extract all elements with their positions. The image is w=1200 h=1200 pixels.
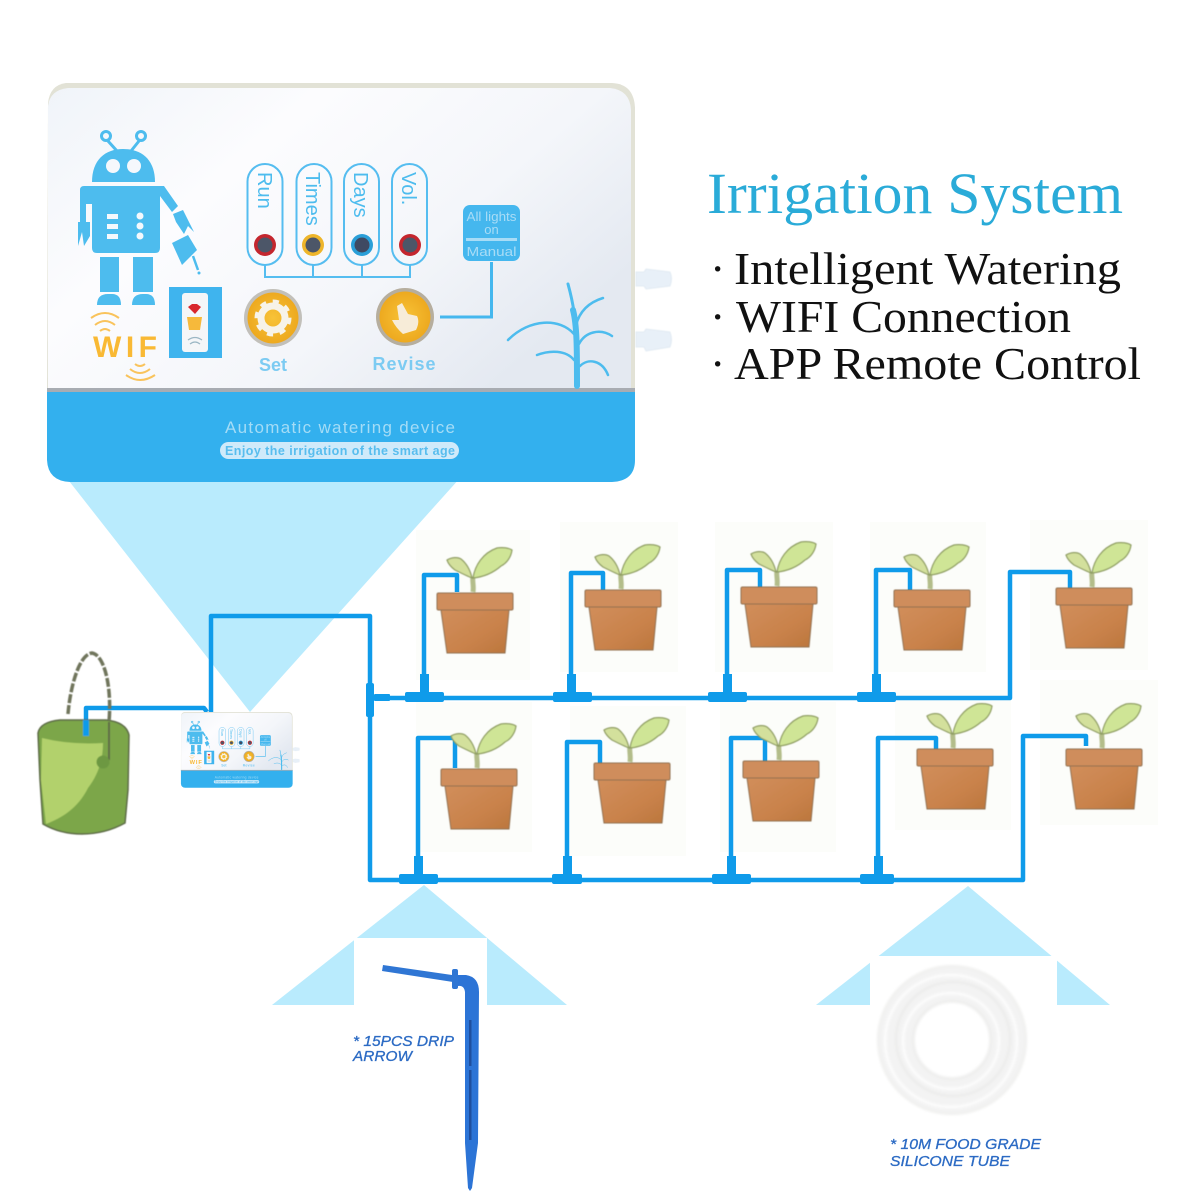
bucket handle ring — [96, 722, 110, 768]
WiFi label: WIF — [93, 331, 157, 364]
plant 3 — [741, 542, 817, 647]
plant graphic on device — [508, 284, 612, 386]
callout cone: device zoom — [62, 472, 460, 712]
plant 5 — [1056, 543, 1132, 648]
All lights on Manual key — [440, 205, 520, 317]
plant 2 — [585, 545, 661, 650]
All lights on Manual key: Manual — [466, 244, 517, 259]
indicator LEDs — [254, 234, 421, 256]
plant 10 — [1066, 704, 1142, 809]
feature list: · — [710, 338, 725, 389]
indicator pills — [248, 164, 427, 277]
All lights on Manual key: All lights — [466, 209, 517, 224]
drip arrow caption: * 15PCS DRIP — [353, 1033, 454, 1050]
silicone tube caption: * 10M FOOD GRADE — [890, 1136, 1042, 1153]
plant 6 — [441, 724, 517, 829]
callout cone: silicone tube — [816, 886, 1110, 1005]
white backing behind drip arrow — [354, 938, 487, 1018]
silicone tube caption: SILICONE TUBE — [890, 1153, 1011, 1170]
controller device enlarged — [47, 83, 672, 482]
indicator labels — [253, 172, 419, 226]
feature list — [710, 243, 1141, 389]
silicone tube coil — [878, 966, 1026, 1114]
device casing — [47, 83, 635, 392]
indicator labels: Run — [253, 172, 275, 209]
arrow stem tube — [382, 965, 453, 982]
indicator labels: Days — [349, 172, 371, 218]
plant pots, lower row — [441, 704, 1142, 829]
device hose nipples — [636, 269, 672, 351]
Set button — [244, 289, 302, 375]
plant 1 — [437, 548, 513, 653]
arrow spike — [458, 975, 479, 1191]
silicone tube caption — [890, 1136, 1042, 1170]
device tagline: Enjoy the irrigation of the smart age — [225, 444, 455, 458]
Revise button: Revise — [372, 354, 436, 374]
feature list: · — [710, 291, 725, 342]
drip arrow caption: ARROW — [352, 1048, 414, 1065]
drip arrow — [382, 965, 479, 1191]
title: Irrigation System — [707, 161, 1123, 226]
callout cone: drip arrow — [272, 885, 567, 1005]
bucket body — [38, 720, 129, 834]
arrow flange — [452, 969, 458, 989]
pipe tee fittings — [366, 674, 896, 884]
device blue band — [47, 389, 635, 482]
WiFi label — [91, 313, 157, 380]
background tint: plant photo squares — [416, 520, 1158, 856]
feature list: · — [710, 243, 725, 294]
All lights on Manual key: on — [484, 222, 499, 237]
bucket water inlet — [83, 720, 89, 736]
water pipes — [86, 570, 1086, 880]
feature list: WIFI Connection — [736, 291, 1071, 342]
Set button: Set — [259, 355, 287, 375]
plant 4 — [894, 545, 970, 650]
plant 8 — [743, 716, 819, 821]
controller device miniature — [181, 712, 300, 788]
plant pots, upper row — [437, 542, 1132, 653]
plant 7 — [594, 718, 670, 823]
water bucket — [38, 653, 129, 834]
arrow slots — [469, 1020, 472, 1140]
robot icon — [78, 132, 200, 305]
bucket handle — [68, 653, 110, 722]
Revise button — [372, 288, 436, 374]
bucket inner light panel — [41, 738, 103, 824]
phone app icon — [169, 287, 222, 358]
device face — [48, 88, 631, 388]
indicator labels: Times — [301, 172, 323, 226]
drip arrow caption — [352, 1033, 454, 1065]
feature list: Intelligent Watering — [734, 243, 1121, 294]
device caption: Automatic watering device — [225, 418, 455, 437]
plant 9 — [917, 704, 993, 809]
feature list: APP Remote Control — [734, 338, 1141, 389]
indicator labels: Vol. — [397, 172, 419, 205]
white backing behind silicone tube — [870, 956, 1057, 1016]
